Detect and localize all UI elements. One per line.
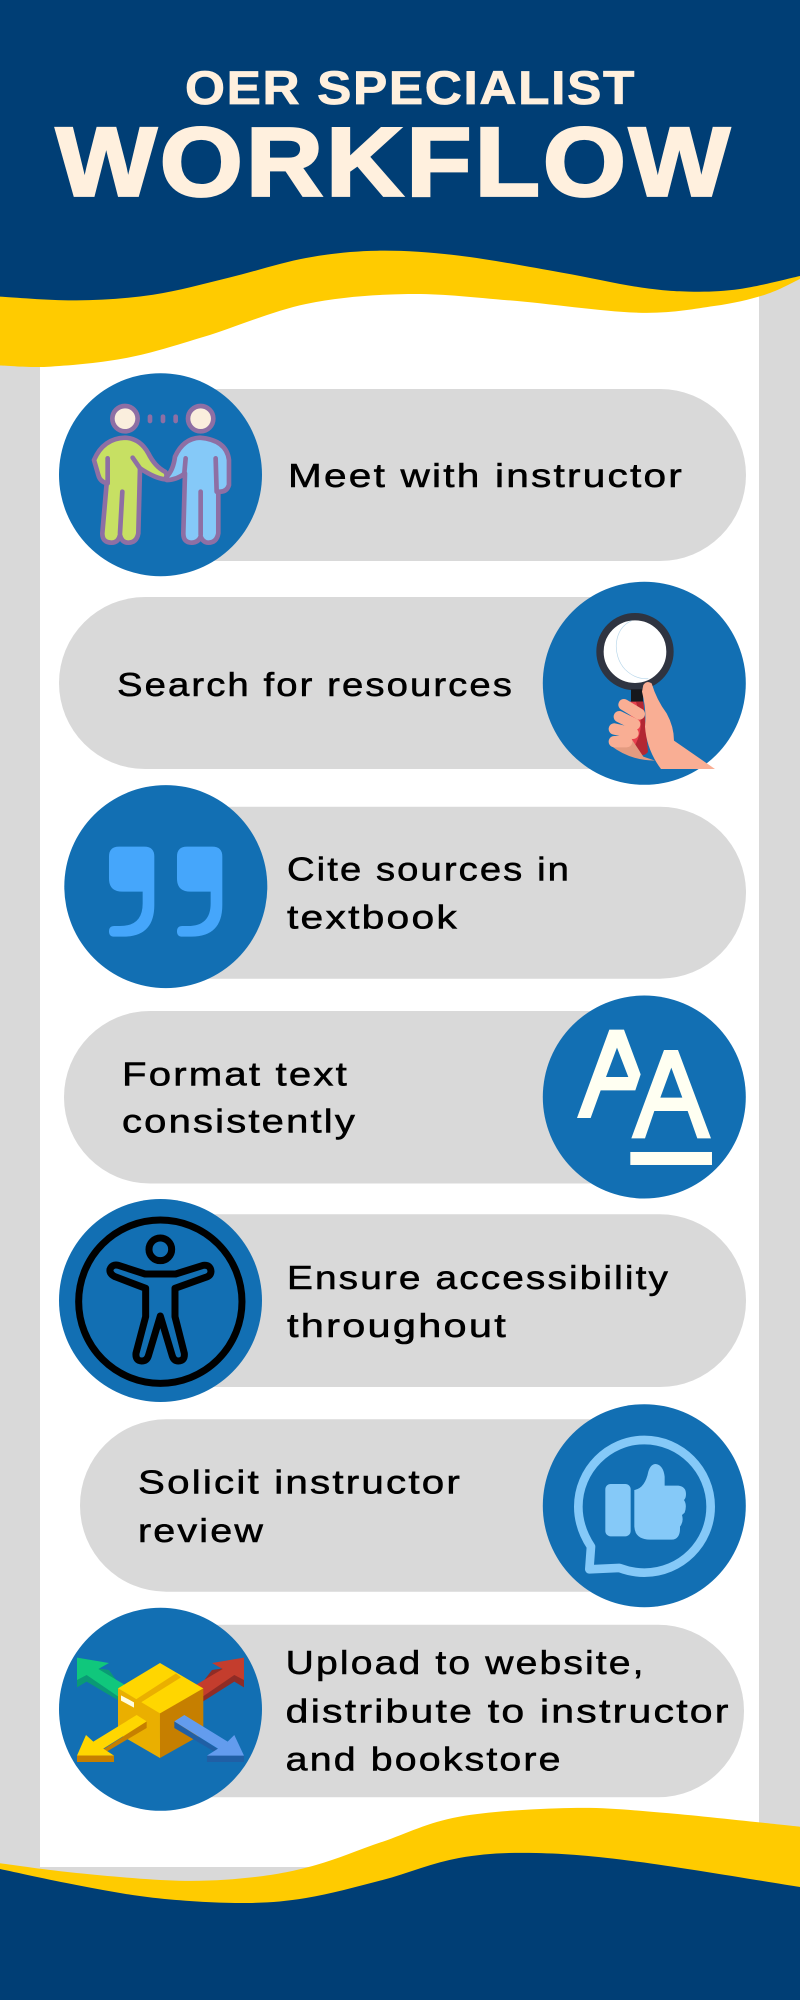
circle xyxy=(64,785,267,988)
pill xyxy=(64,1011,719,1184)
label: Cite sources in xyxy=(287,850,571,888)
title line: OER SPECIALIST: OER SPECIALIST xyxy=(185,61,636,114)
circle xyxy=(543,582,746,785)
label xyxy=(286,1644,731,1778)
circle xyxy=(59,373,262,576)
label: Ensure accessibility xyxy=(287,1259,670,1296)
pill xyxy=(80,1214,746,1387)
pill xyxy=(80,1625,744,1797)
icon: quotation marks xyxy=(109,847,222,937)
step 5: ensure accessibility xyxy=(59,1199,746,1402)
label: Solicit instructor xyxy=(138,1464,462,1500)
title xyxy=(56,61,733,216)
footer wave: yellow xyxy=(0,1808,800,1950)
label: Meet with instructor xyxy=(288,457,684,494)
icon: thumbs up speech bubble xyxy=(578,1440,711,1573)
icon: box with four arrows xyxy=(77,1658,244,1762)
icon: accessibility figure xyxy=(79,1220,242,1383)
label: Search for resources xyxy=(117,666,514,703)
label: distribute to instructor xyxy=(286,1692,731,1730)
step 2: search for resources xyxy=(59,582,746,785)
label xyxy=(287,1259,670,1344)
footer wave: navy xyxy=(0,1853,800,2000)
header wave: navy xyxy=(0,0,800,300)
step 6: solicit review xyxy=(80,1404,746,1607)
title line: WORKFLOW: WORKFLOW xyxy=(56,108,733,216)
circle xyxy=(543,996,746,1198)
step 7: upload and distribute xyxy=(59,1608,744,1811)
pill xyxy=(85,807,746,979)
circle xyxy=(543,1404,746,1607)
step 1: meet with instructor xyxy=(59,373,746,576)
label xyxy=(138,1464,462,1549)
icon: typography letters xyxy=(577,1030,712,1165)
step 4: format text xyxy=(64,996,746,1198)
label: consistently xyxy=(122,1102,357,1140)
pill xyxy=(59,597,719,769)
step 3: cite sources xyxy=(64,785,746,988)
pill xyxy=(80,1419,719,1592)
label: and bookstore xyxy=(286,1740,563,1778)
white content panel xyxy=(40,270,759,1867)
label: Format text xyxy=(122,1056,349,1092)
icon: hand holding magnifying glass xyxy=(600,617,715,769)
label: Upload to website, xyxy=(286,1644,646,1681)
header wave: yellow xyxy=(0,200,800,367)
circle xyxy=(59,1199,262,1402)
pill xyxy=(80,389,746,561)
circle xyxy=(59,1608,262,1811)
label: review xyxy=(138,1512,265,1549)
label xyxy=(122,1056,357,1140)
label xyxy=(287,850,571,936)
label: textbook xyxy=(287,898,459,936)
icon: two people shaking hands xyxy=(94,406,229,543)
label: throughout xyxy=(287,1307,508,1344)
